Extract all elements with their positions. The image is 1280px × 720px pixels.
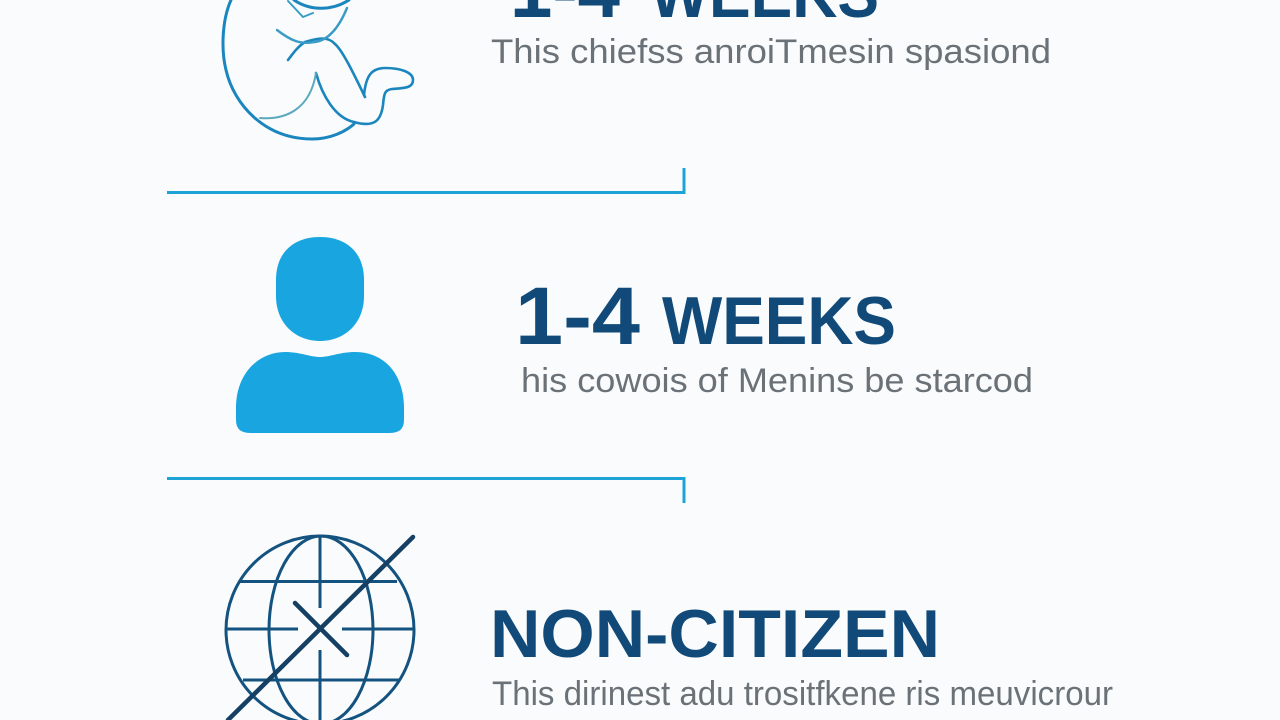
- panel: third item: [226, 536, 1113, 720]
- divider: first bracket line: [167, 168, 684, 192]
- panel: second item: [236, 237, 1033, 433]
- text: first description: This chiefss anroiTmesin spasiond: [491, 33, 1051, 71]
- panel: first item: [223, 0, 1051, 139]
- heading: non-citizen: NON-CITIZEN: [490, 596, 940, 672]
- text: second description: his cowois of Menins be starcod: [521, 362, 1033, 400]
- icon: fetus outline: [223, 0, 413, 139]
- divider: second bracket line: [167, 478, 684, 503]
- icon: crossed-out globe: [226, 536, 414, 720]
- icon: person: [236, 237, 404, 433]
- heading: 1-4 weeks: WEEKS: [662, 283, 896, 359]
- text: third description: This dirinest adu trositfkene ris meuvicrour: [492, 675, 1113, 713]
- heading: 1-4 weeks: 1-4: [515, 271, 640, 362]
